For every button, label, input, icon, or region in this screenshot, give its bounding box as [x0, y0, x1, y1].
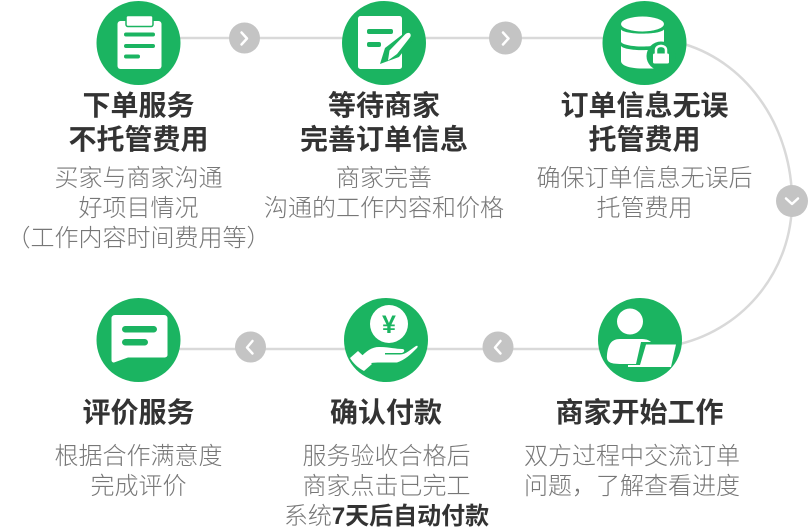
step 2 heading: 完善订单信息 [300, 124, 468, 155]
arrow: step 1 to 2 [229, 22, 260, 54]
step 5 description: 服务验收合格后 [302, 443, 470, 470]
icon: hand holding yen coin [344, 298, 428, 382]
step 5 description: 商家点击已完工 [302, 473, 470, 500]
icon: chat bubble [96, 298, 180, 382]
step 3 description [536, 165, 752, 222]
icon: database with lock [602, 1, 686, 85]
icon: clipboard [96, 1, 180, 85]
icon: document and pen [342, 1, 426, 85]
arrow: step 4 to 5 [482, 332, 514, 362]
step 2 heading [300, 90, 468, 155]
step 3 description: 托管费用 [596, 195, 692, 222]
step 4 description [524, 443, 740, 500]
step 2 heading: 等待商家 [328, 90, 440, 121]
step 4 description: 问题，了解查看进度 [524, 473, 740, 500]
step 6 description [54, 443, 222, 500]
step 1 heading [68, 90, 209, 155]
step 1 description: （工作内容时间费用等） [6, 225, 270, 252]
step 5 description [284, 443, 489, 530]
step 6 description: 根据合作满意度 [54, 443, 222, 470]
step 3 heading: 订单信息无误 [560, 90, 729, 121]
step 5 description: 系统7天后自动付款 [284, 503, 489, 530]
step 4 description: 双方过程中交流订单 [524, 443, 740, 470]
step 3 heading: 托管费用 [588, 124, 701, 155]
step 2 description: 商家完善 [336, 165, 432, 192]
step 1 description [6, 165, 270, 252]
step 1 heading: 不托管费用 [68, 124, 209, 155]
icon: person at laptop [598, 298, 682, 382]
step 1 description: 好项目情况 [78, 195, 198, 222]
icon: hand holding yen coin: ¥ [382, 311, 396, 339]
step 6 description: 完成评价 [90, 473, 186, 500]
step 1 description: 买家与商家沟通 [54, 165, 222, 192]
step 3 heading [560, 90, 729, 155]
step 1 heading: 下单服务 [82, 90, 195, 121]
step 5 heading: 确认付款 [330, 397, 442, 428]
step 2 description: 沟通的工作内容和价格 [264, 195, 504, 222]
arrow: step 3 to 4 [776, 185, 808, 217]
connector lines [175, 38, 792, 349]
step 6 heading: 评价服务 [82, 397, 195, 428]
step 2 description [264, 165, 504, 222]
step 4 heading: 商家开始工作 [555, 397, 724, 428]
arrow: step 2 to 3 [489, 22, 522, 54]
arrow: step 5 to 6 [235, 332, 266, 362]
step 3 description: 确保订单信息无误后 [536, 165, 752, 192]
